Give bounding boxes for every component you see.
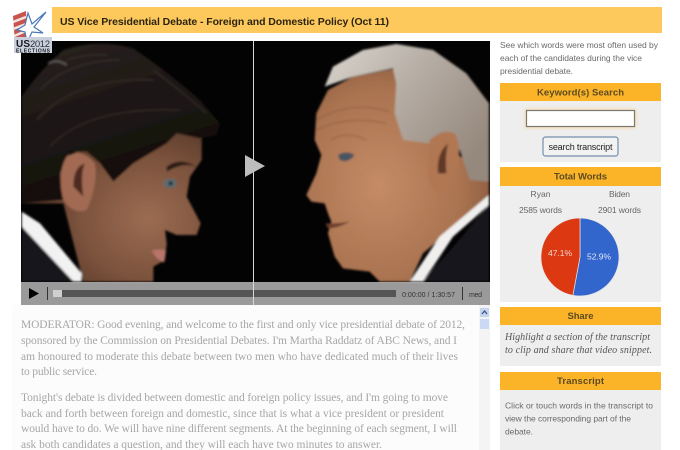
candidate word counts: 2585 words [519, 205, 562, 215]
title bar: US Vice Presidential Debate - Foreign and Domestic Policy (Oct 11) [60, 16, 389, 28]
controls bar: med [469, 292, 482, 299]
transcript instructions: view the corresponding part of the [505, 414, 631, 424]
intro text: presidential debate. [500, 66, 573, 76]
text: transcript: to public service. [21, 366, 97, 378]
candidate word counts [519, 189, 641, 215]
heading: share: Share [568, 311, 594, 322]
panel: keyword search [500, 83, 661, 162]
logo: US 2012 Elections: US [16, 39, 30, 50]
transcript instructions: Click or touch words in the transcript to [505, 400, 653, 410]
scrollbar [479, 305, 490, 450]
photo: Joe Biden profile [306, 44, 489, 282]
controls bar [21, 282, 490, 305]
controls bar: 0:00:00 / 1:30:57 [402, 292, 455, 299]
intro text: each of the candidates during the vice [500, 53, 642, 63]
search button: search transcript [548, 142, 613, 152]
candidate word counts: 2901 words [598, 205, 641, 215]
transcript instructions [505, 400, 653, 436]
text: transcript: sponsored by the Commission on Presidential Debates. I'm Martha Raddatz of ABC News, and I [21, 335, 457, 347]
text: transcript: would have to do. We will have nine different segments. At the beginning of each segment, I will [21, 423, 457, 435]
text: transcript: am honoured to moderate this debate between two men who have dedicated much of their lives [21, 351, 459, 363]
share text [504, 332, 652, 356]
share text: to clip and share that video snippet. [505, 345, 652, 356]
text: transcript: Tonight's debate is divided between domestic and foreign policy issues, and I'm going to move [21, 392, 448, 404]
title bar [52, 7, 662, 33]
text: transcript: MODERATOR: Good evening, and welcome to the first and only vice presidential debate of 2012, [21, 319, 465, 331]
icon: large play triangle [245, 155, 265, 177]
heading: transcript [500, 372, 661, 390]
panel: transcript info [500, 372, 661, 450]
pie chart [541, 218, 619, 296]
heading: keyword search [500, 83, 661, 101]
panel: share [500, 307, 661, 366]
heading: transcript: Transcript [557, 376, 605, 387]
panel: transcript background [12, 305, 479, 450]
intro text: See which words were most often used by [500, 40, 659, 50]
pie chart: 47.1% [548, 248, 572, 258]
heading: total words: Total Words [554, 172, 607, 182]
heading: total words [500, 167, 661, 186]
icon: play button [29, 288, 39, 299]
pie chart: 52.9% [587, 252, 611, 262]
logo: US 2012 Elections: 2012 [30, 39, 50, 50]
search input [525, 109, 636, 128]
photo: Paul Ryan profile [22, 44, 220, 282]
video player [21, 41, 490, 305]
logo: US 2012 Elections: ELECTIONS [16, 48, 51, 54]
intro text [500, 40, 659, 76]
text: transcript: back and forth between foreign and domestic, since that is what a vice president or president [21, 408, 445, 420]
text: transcript [21, 319, 465, 450]
divider line [253, 41, 254, 305]
candidate word counts: Biden [609, 189, 630, 199]
panel: total words [500, 167, 661, 302]
heading: keyword search: Keyword(s) Search [537, 88, 624, 98]
transcript instructions: debate. [505, 426, 533, 436]
search button [543, 137, 618, 156]
candidate word counts: Ryan [530, 189, 551, 199]
logo: US 2012 Elections [12, 7, 52, 54]
share text: Highlight a section of the transcript [504, 332, 650, 343]
heading: share [500, 307, 661, 325]
